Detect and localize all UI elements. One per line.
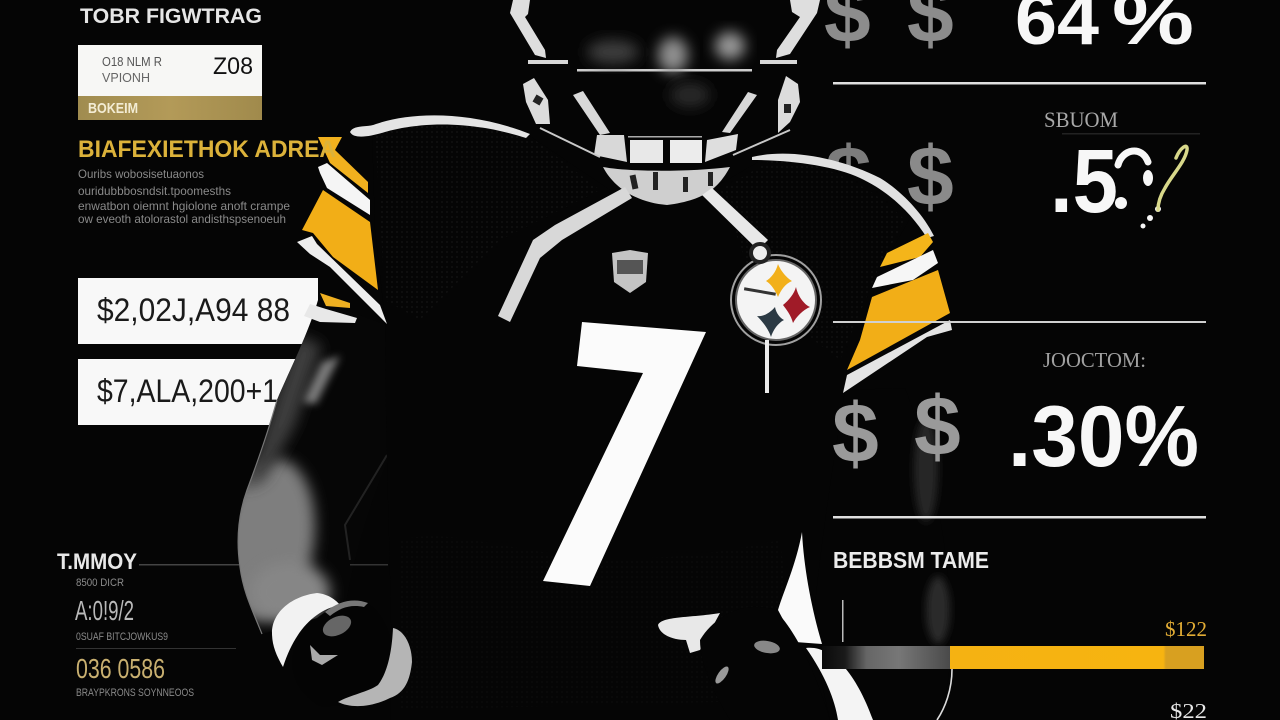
helmet: cage panels xyxy=(594,135,627,162)
chart axis tick xyxy=(842,600,844,642)
panel: bottom left stats: BRAYPKRONS SOYNNEOOS xyxy=(76,687,194,699)
heading: gold subtitle: BIAFEXIETHOK ADREA xyxy=(78,136,336,163)
sleeve: right xyxy=(843,233,952,393)
card: white stat: Z08 xyxy=(213,53,253,80)
helmet: left and right clips xyxy=(523,78,550,124)
panel: top left summary xyxy=(78,5,336,226)
card: white stat: O18 NLM R xyxy=(102,54,162,69)
panel: right stats xyxy=(824,0,1206,573)
icon: NFL shield xyxy=(612,250,648,293)
icon: dollar signs behind shoulder xyxy=(825,129,954,223)
arm: right xyxy=(800,388,951,720)
stat: white value: A:0!9/2 xyxy=(75,595,134,626)
icon: dollar signs behind shoulder: $ xyxy=(907,129,954,223)
torso: white gap xyxy=(778,532,822,644)
bar chart xyxy=(822,600,1207,720)
panel: white amount boxes xyxy=(78,278,318,425)
stat row: percentage: JOOCTOM: xyxy=(1043,348,1146,372)
sleeve: left xyxy=(297,137,387,324)
bar: gold xyxy=(950,646,1204,669)
bar label: first: $122 xyxy=(1165,617,1207,641)
player xyxy=(211,0,952,720)
stat row: percentage: $ xyxy=(832,386,879,480)
jersey xyxy=(372,119,915,720)
box: first amount: $2,02J,A94 88 xyxy=(97,292,290,328)
shoulder trim: right xyxy=(752,154,934,238)
stat row: middle xyxy=(833,107,1206,323)
text block: description: ouridubbbosndsit.tpoomesths xyxy=(78,184,231,198)
squiggle: gold mark xyxy=(1158,146,1187,210)
panel: bottom left stats: 0SUAF BITCJOWKUS9 xyxy=(76,631,168,643)
icon: garbled marks xyxy=(1115,151,1161,228)
jersey: mesh texture xyxy=(400,536,800,710)
card: white stat xyxy=(78,45,262,120)
helmet facemask xyxy=(510,0,820,205)
stat row: middle: .5 xyxy=(1050,132,1118,232)
card: white stat: BOKEIM xyxy=(88,100,138,117)
arm: left xyxy=(238,300,343,632)
box: first amount xyxy=(78,278,318,344)
icon: dollar signs behind shoulder: $ xyxy=(825,129,872,223)
panel: bottom left stats: 8500 DICR xyxy=(76,577,124,589)
helmet: diagonal bars xyxy=(573,91,610,135)
bar: grey overlay part xyxy=(822,646,950,669)
stat row: middle: SBUOM xyxy=(1044,107,1118,132)
straps xyxy=(498,187,768,322)
heading: top left: TOBR FIGWTRAG xyxy=(80,5,262,28)
helmet: chin cup xyxy=(603,167,730,205)
box: second amount: $7,ALA,200+1 xyxy=(97,373,278,409)
arm: inner seam xyxy=(345,455,387,560)
heading: bottom left: T.MMOY xyxy=(57,549,137,574)
hand: left xyxy=(272,593,412,706)
stat row: percentage: $ xyxy=(914,379,961,473)
stat row: percentage xyxy=(832,348,1206,518)
card: white stat: VPIONH xyxy=(102,70,150,85)
box: second amount xyxy=(78,359,303,425)
helmet: visor glow xyxy=(658,37,688,73)
heading: bar section: BEBBSM TAME xyxy=(833,547,989,573)
text block: description: enwatbon oiemnt hgiolone anoft crampe xyxy=(78,199,290,213)
arm: left rim xyxy=(238,400,277,634)
hand: right xyxy=(658,607,873,720)
stat: gold value: 036 0586 xyxy=(76,653,165,684)
helmet: shell sides xyxy=(510,0,546,58)
text block: description: ow eveoth atolorastol andisthspsenoeuh xyxy=(78,212,286,226)
panel: bottom left stats xyxy=(57,549,388,699)
icon: team logo xyxy=(731,244,821,393)
text block: description xyxy=(78,167,290,226)
shoulder trim: left xyxy=(350,115,530,138)
stat row: top xyxy=(824,0,1206,84)
text block: description: Ouribs wobosisetuaonos xyxy=(78,167,204,181)
arm: right highlights xyxy=(914,418,952,720)
jersey number 7 xyxy=(543,322,706,586)
stat row: percentage: .30% xyxy=(1008,389,1199,485)
